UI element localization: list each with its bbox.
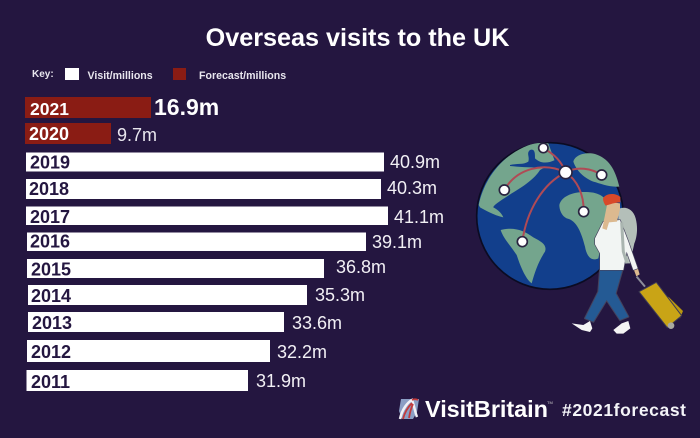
- bar 2014: 35.3m: [315, 285, 365, 305]
- bar 2017: [26, 206, 444, 227]
- bar 2012: [27, 340, 327, 362]
- bar 2013: [28, 312, 342, 333]
- bar chart: [25, 94, 444, 392]
- route markers: [499, 143, 607, 247]
- europe landmass: [573, 153, 619, 187]
- hand: [633, 268, 640, 276]
- bar 2017: 2017: [30, 207, 70, 227]
- bar 2012: 32.2m: [277, 342, 327, 362]
- red hair cap: [603, 194, 620, 206]
- south america landmass: [501, 229, 546, 283]
- bar 2021: [25, 94, 219, 120]
- shoes: [572, 321, 592, 332]
- bar 2019: 2019: [30, 152, 70, 172]
- bar 2011: 31.9m: [256, 371, 306, 391]
- shirt: [595, 220, 638, 270]
- bar 2019: [26, 152, 440, 172]
- bar 2018: 40.3m: [387, 178, 437, 198]
- bar 2020: [25, 123, 157, 145]
- bar 2011: [26, 370, 306, 392]
- legend: Visit/millions: [88, 70, 153, 82]
- bar 2019: 40.9m: [390, 152, 440, 172]
- hudson bay inlet: [510, 150, 557, 168]
- title: Overseas visits to the UK: [206, 24, 509, 52]
- bar 2014: 2014: [31, 286, 71, 306]
- hair and face: [602, 202, 620, 230]
- icon: union flag shield: [399, 399, 419, 419]
- bar 2018: 2018: [29, 179, 69, 199]
- bar 2018: [26, 178, 437, 199]
- backpack strap: [622, 222, 627, 263]
- bar 2016: 2016: [30, 232, 70, 252]
- bar 2020: 9.7m: [117, 125, 157, 145]
- legs: [585, 270, 628, 322]
- bar 2021: 16.9m: [154, 94, 219, 120]
- bar 2015: [27, 257, 386, 280]
- backpack: [618, 208, 637, 263]
- icon: globe: [477, 143, 623, 289]
- bar 2021: 2021: [30, 99, 69, 119]
- bar 2013: 33.6m: [292, 313, 342, 333]
- bar 2020: 2020: [29, 124, 69, 144]
- bar 2011: 2011: [31, 372, 70, 392]
- icon: traveller with suitcase: [572, 194, 683, 334]
- bar 2016: 39.1m: [372, 232, 422, 252]
- bar 2012: 2012: [31, 342, 71, 362]
- bar 2015: 36.8m: [336, 257, 386, 277]
- bar 2017: 41.1m: [394, 207, 444, 227]
- legend: Forecast/millions: [199, 70, 286, 82]
- bar 2016: [27, 232, 422, 252]
- africa landmass: [559, 192, 608, 259]
- legend: [32, 68, 286, 82]
- bar 2014: [28, 285, 365, 306]
- legend: Key:: [32, 69, 54, 80]
- bar 2015: 2015: [31, 260, 71, 280]
- suitcase: [639, 282, 683, 329]
- footer: VisitBritain logo: VisitBritain: [425, 396, 548, 422]
- illustration: globe and traveller: [477, 143, 683, 334]
- hashtag: #2021forecast: [562, 400, 686, 420]
- north america landmass: [479, 143, 555, 217]
- footer: VisitBritain logo: TM: [547, 400, 553, 405]
- route lines: [504, 148, 602, 242]
- suitcase handle: [637, 277, 645, 287]
- bar 2013: 2013: [32, 313, 72, 333]
